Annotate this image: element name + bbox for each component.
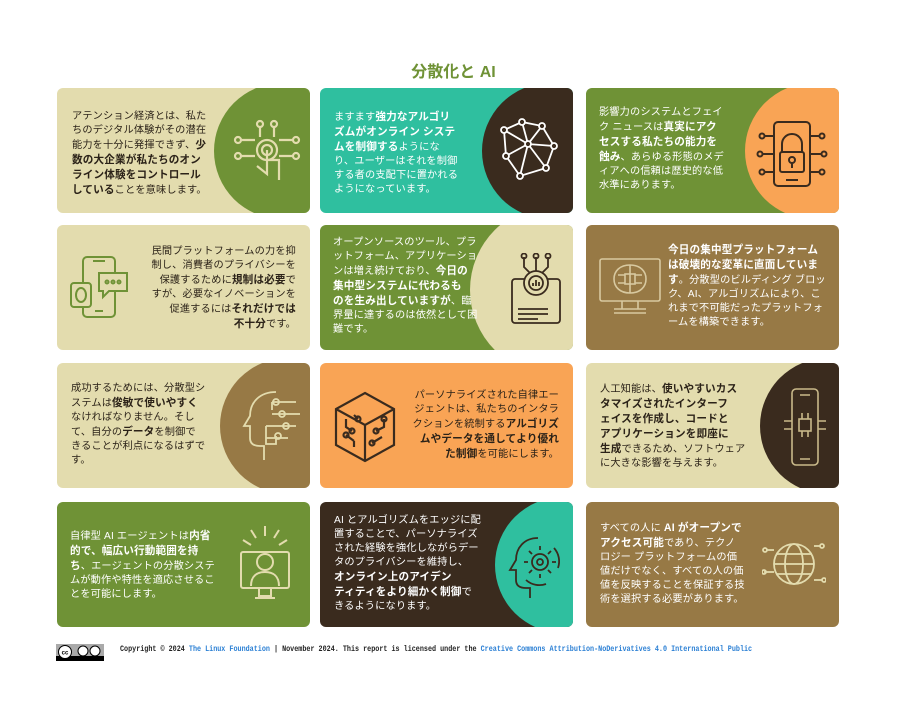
card r1c1 <box>57 88 310 213</box>
text r4c2: タのプライバシーを維持し、 <box>334 557 468 568</box>
text r2c2 <box>333 236 477 335</box>
card r4c2 <box>320 502 573 627</box>
text r3c2: パーソナライズされた自律エー <box>415 390 559 401</box>
text r4c2: ティティをより細かく制御で <box>334 586 472 598</box>
text r3c3 <box>600 382 745 469</box>
text r4c3: 値だけでなく、すべての人の価 <box>600 566 744 577</box>
text r2c2: ンは増え続けており、今日の <box>333 265 468 277</box>
text r1c2: り、ユーザーはそれを制御 <box>334 156 457 167</box>
text r4c2: 置することで、パーソナライズ <box>334 529 478 540</box>
text r4c2: AI とアルゴリズムをエッジに配 <box>334 515 481 526</box>
text r1c3: ク ニュースは真実にアク <box>599 121 717 133</box>
text r2c2: 集中型システムに代わるも <box>333 280 462 292</box>
text r1c1: 数の大企業が私たちのオン <box>72 154 201 166</box>
text r1c1: していることを意味します。 <box>72 184 207 196</box>
text r4c3: 術を選択する必要があります。 <box>600 594 744 605</box>
text r3c1: す。 <box>71 455 91 466</box>
icon: monitor person <box>240 526 290 599</box>
footer: cc badge: cc <box>62 650 69 656</box>
card r1c2 <box>320 88 573 213</box>
text r4c1: ムが動作や特性を適応させるこ <box>70 575 215 586</box>
icon: monitor brain <box>599 258 661 314</box>
text r1c1: 能力を十分に発揮できず、少 <box>72 139 206 151</box>
text r3c2: ジェントは、私たちのインタラ <box>414 404 559 415</box>
text r4c3: ロジー プラットフォームの価 <box>600 552 737 563</box>
text r3c2: ムやデータを通してより優れ <box>420 433 559 445</box>
text r1c1: ライン体験をコントロール <box>72 169 201 181</box>
text r2c3 <box>668 244 826 328</box>
text r3c2 <box>413 389 559 460</box>
text r1c1: アテンション経済とは、私た <box>72 111 206 122</box>
text r1c2: ようになっています。 <box>334 184 436 195</box>
card r3c1 <box>57 363 310 488</box>
text r1c2: ますます強力なアルゴリ <box>334 111 450 123</box>
text r4c1: ち、エージェントの分散システ <box>70 560 215 572</box>
icon: globe network <box>762 543 826 585</box>
text r3c1: ステムは俊敏で使いやすく <box>71 397 198 409</box>
icon: lock phone <box>756 121 828 187</box>
text r3c2: た制御を可能にします。 <box>445 448 559 460</box>
text r2c2: 界量に達するのは依然として困 <box>333 310 477 321</box>
text r2c1: 不十分です。 <box>234 318 296 330</box>
icon: circuit head <box>242 391 300 460</box>
card r2c3 <box>586 225 839 350</box>
text r4c3 <box>600 521 745 605</box>
text r3c3: 生成できるため、ソフトウェア <box>600 443 745 455</box>
icon: head gear <box>508 537 560 598</box>
text r4c2 <box>334 514 481 612</box>
card r4c3 <box>586 502 839 627</box>
text r4c3: アクセス可能であり、テクノ <box>600 537 735 549</box>
card r2c1 <box>57 225 310 350</box>
text r2c3: ク、AI、アルゴリズムにより、こ <box>668 289 821 300</box>
text r2c1: 制し、消費者のプライバシーを <box>151 260 296 271</box>
text r1c1 <box>72 110 207 196</box>
text r1c3: 影響力のシステムとフェイ <box>599 107 723 118</box>
title: 分散化と AI <box>411 64 496 81</box>
text r2c2: ットフォーム、アプリケーショ <box>333 251 477 262</box>
text r2c2: のを生み出していますが、臨 <box>333 295 472 307</box>
text r1c2: ズムがオンライン システ <box>334 126 455 138</box>
text r1c2 <box>334 110 458 195</box>
text r4c3: 値を反映することを保証する技 <box>600 580 745 591</box>
text r2c1 <box>151 245 296 330</box>
text r1c2: する者の支配下に置かれる <box>334 170 458 181</box>
icon: circuit cube <box>334 392 396 462</box>
text r4c2: された経験を強化しながらデー <box>334 543 479 554</box>
text r3c1 <box>71 382 205 466</box>
text r4c3: すべての人に AI がオープンで <box>600 522 742 534</box>
icon: gear document <box>511 253 561 324</box>
icon: phone chat <box>70 256 128 318</box>
text r2c1: 促進するにはそれだけでは <box>170 303 296 315</box>
text r4c1: とを可能にします。 <box>70 589 162 600</box>
text r1c3 <box>599 106 724 191</box>
text r1c1: ちのデジタル体験がその潜在 <box>72 125 206 136</box>
text r2c1: 民間プラットフォームの力を抑 <box>152 246 296 257</box>
icon: phone chip <box>784 388 826 466</box>
text r3c1: て、自分のデータを制御で <box>71 426 196 438</box>
text r4c2: オンライン上のアイデン <box>334 571 452 583</box>
text r3c1: きることが利点になるはずで <box>71 441 205 452</box>
text r4c1: 的で、幅広い行動範囲を持 <box>70 545 198 557</box>
text r1c3: セスする私たちの能力を <box>599 136 717 148</box>
text r2c3: ームを構築できます。 <box>668 317 770 328</box>
icon: touch network <box>234 120 300 180</box>
card r3c2 <box>320 363 573 488</box>
text r1c3: 水準にあります。 <box>599 180 681 191</box>
text r4c1: 自律型 AI エージェントは内省 <box>70 530 211 542</box>
text r1c3: ィアへの信頼は歴史的な低 <box>599 166 723 177</box>
text r3c3: アプリケーションを即座に <box>600 428 729 440</box>
card r2c2 <box>320 225 573 350</box>
card r4c1 <box>57 502 310 627</box>
text r2c2: 難です。 <box>333 324 373 335</box>
text r4c2: きるようになります。 <box>334 601 436 612</box>
text r3c3: ェイスを作成し、コードと <box>600 413 729 425</box>
footer: copyright: Copyright © 2024 The Linux Foundation | November 2024. This report is licensed under the Creative Commons Attribution-NoDerivatives 4.0 International Public <box>120 646 752 654</box>
text r2c3: 今日の集中型プラットフォーム <box>668 244 818 256</box>
text r2c2: オープンソースのツール、プラ <box>333 237 477 248</box>
card r1c3 <box>586 88 839 213</box>
text r1c2: ムを制御するようにな <box>334 141 440 153</box>
text r2c3: は破壊的な変革に直面していま <box>668 259 818 271</box>
text r2c3: す。分散型のビルディング ブロッ <box>668 274 826 286</box>
text r3c3: 人工知能は、使いやすいカス <box>600 383 737 395</box>
text r2c1: すが、必要なイノベーションを <box>152 289 296 300</box>
text r3c1: 成功するためには、分散型シ <box>71 383 205 394</box>
card r3c3 <box>586 363 839 488</box>
text r3c1: なければなりません。そし <box>71 412 195 423</box>
text r3c3: タマイズされたインターフ <box>600 398 728 410</box>
icon: network mesh <box>500 118 558 180</box>
text r3c2: クションを統制するアルゴリズ <box>413 418 559 430</box>
text r3c3: に大きな影響を与えます。 <box>600 458 723 469</box>
text r2c3: れまで不可能だったプラットフォ <box>668 303 823 314</box>
footer: cc badge <box>56 644 104 661</box>
text r2c1: 保護するために規制は必要で <box>160 274 296 286</box>
text r1c3: 蝕み、あらゆる形態のメデ <box>599 151 724 163</box>
text r4c1 <box>70 530 215 600</box>
